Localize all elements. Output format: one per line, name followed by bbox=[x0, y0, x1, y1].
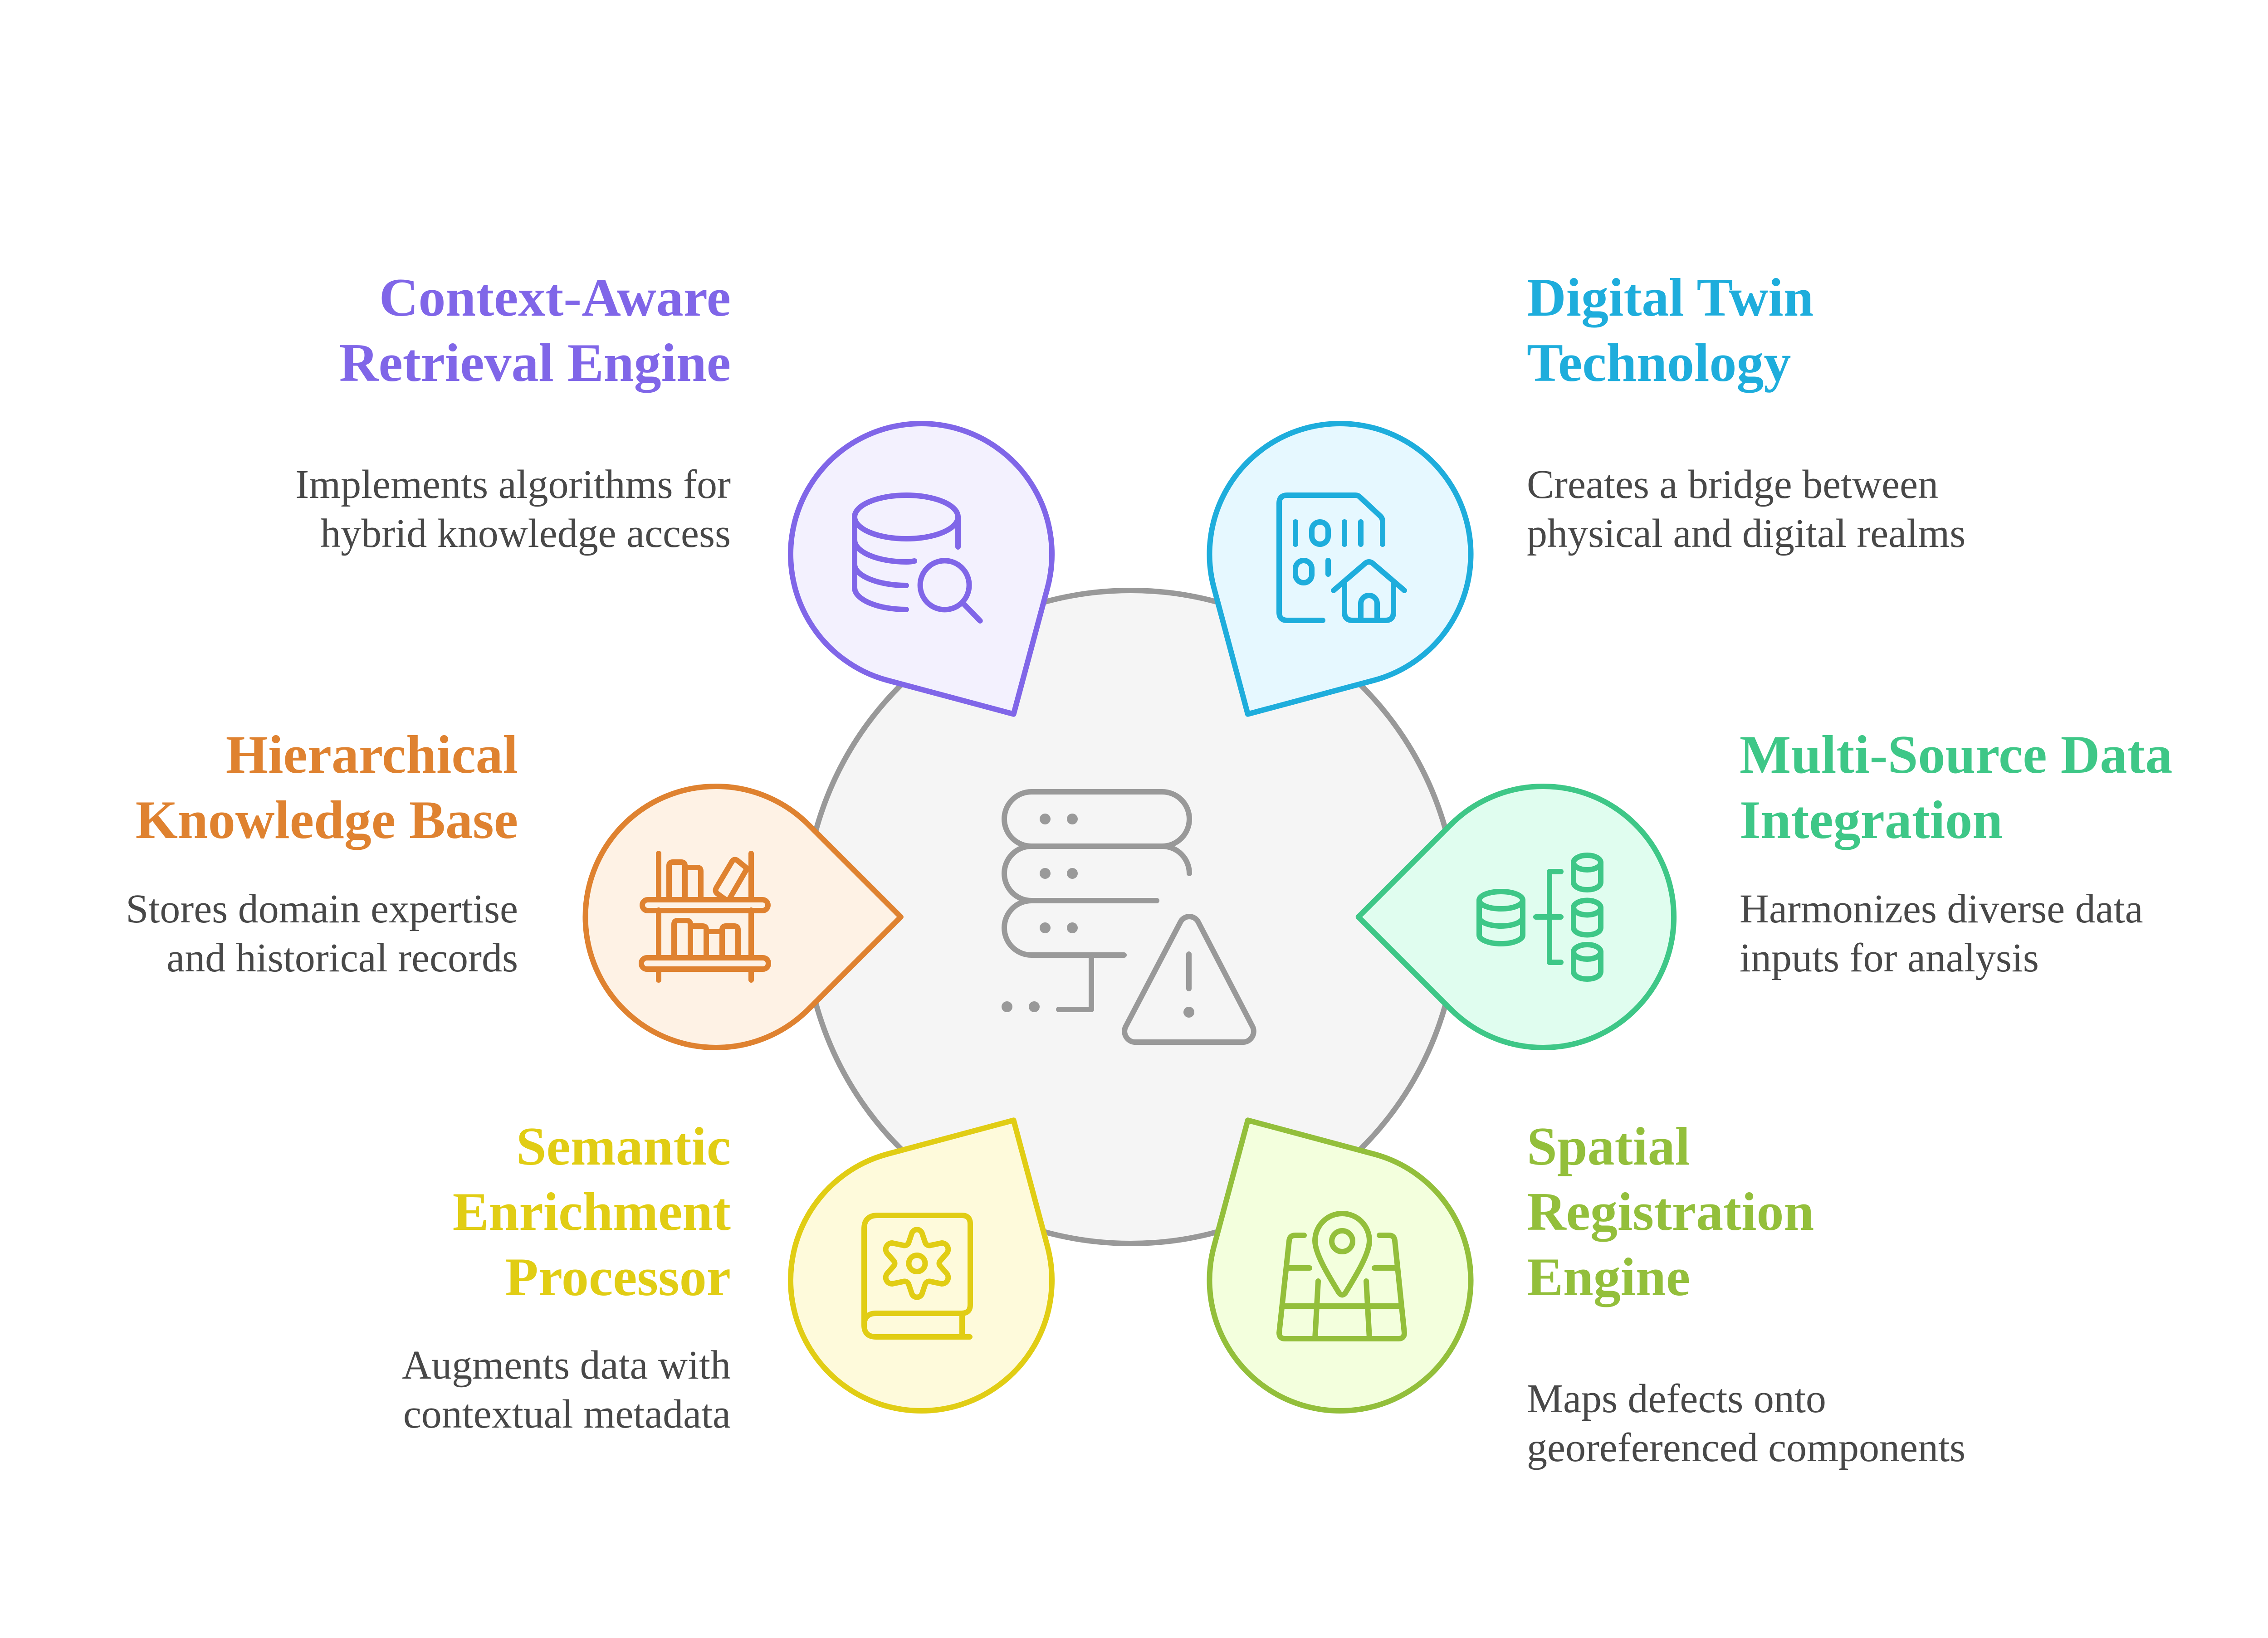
icon: book with gear bbox=[864, 1215, 970, 1337]
icon: one database linked to three databases bbox=[1479, 855, 1601, 979]
pin: green teardrop bbox=[1359, 786, 1674, 1048]
description: Creates a bridge between bbox=[1527, 462, 1938, 507]
pin: yellow teardrop bbox=[791, 1120, 1052, 1411]
heading: Integration bbox=[1740, 790, 2003, 850]
icon: map with location pin bbox=[1279, 1214, 1404, 1339]
heading: Context-Aware bbox=[379, 267, 731, 327]
description: Harmonizes diverse data bbox=[1740, 887, 2143, 931]
heading: Semantic bbox=[516, 1116, 731, 1176]
panel: multi-source data integration bbox=[1359, 724, 2172, 1048]
pin: lime teardrop bbox=[1209, 1120, 1471, 1411]
description: inputs for analysis bbox=[1740, 936, 2039, 980]
heading: Hierarchical bbox=[226, 724, 518, 785]
description: hybrid knowledge access bbox=[320, 511, 731, 556]
central circle bbox=[804, 590, 1457, 1243]
heading: Technology bbox=[1527, 332, 1791, 393]
panel: context-aware retrieval engine bbox=[295, 267, 1052, 714]
heading: Processor bbox=[505, 1247, 731, 1307]
description: and historical records bbox=[166, 936, 518, 980]
pin: orange teardrop bbox=[586, 786, 901, 1048]
pin: purple teardrop bbox=[791, 424, 1052, 714]
panel: hierarchical knowledge base bbox=[126, 724, 901, 1048]
heading: Registration bbox=[1527, 1181, 1814, 1242]
pin: cyan teardrop bbox=[1209, 424, 1471, 714]
icon: server stack with warning triangle bbox=[1002, 792, 1254, 1042]
description: Augments data with bbox=[402, 1343, 731, 1388]
heading: Engine bbox=[1527, 1247, 1690, 1307]
heading: Enrichment bbox=[453, 1181, 731, 1242]
heading: Digital Twin bbox=[1527, 267, 1813, 328]
heading: Knowledge Base bbox=[136, 790, 518, 850]
panel: semantic enrichment processor bbox=[402, 1116, 1052, 1437]
icon: binary document with house bbox=[1279, 495, 1404, 620]
description: physical and digital realms bbox=[1527, 511, 1965, 556]
panel: digital twin technology bbox=[1209, 267, 1965, 714]
description: Maps defects onto bbox=[1527, 1376, 1826, 1421]
panel: spatial registration engine bbox=[1209, 1116, 1965, 1470]
heading: Multi-Source Data bbox=[1740, 724, 2172, 785]
description: Stores domain expertise bbox=[126, 887, 518, 931]
icon: bookshelf bbox=[641, 853, 768, 980]
heading: Retrieval Engine bbox=[339, 332, 731, 393]
heading: Spatial bbox=[1527, 1116, 1690, 1176]
icon: database with magnifier bbox=[855, 495, 980, 621]
description: georeferenced components bbox=[1527, 1425, 1965, 1470]
description: Implements algorithms for bbox=[295, 462, 731, 507]
description: contextual metadata bbox=[403, 1392, 731, 1437]
